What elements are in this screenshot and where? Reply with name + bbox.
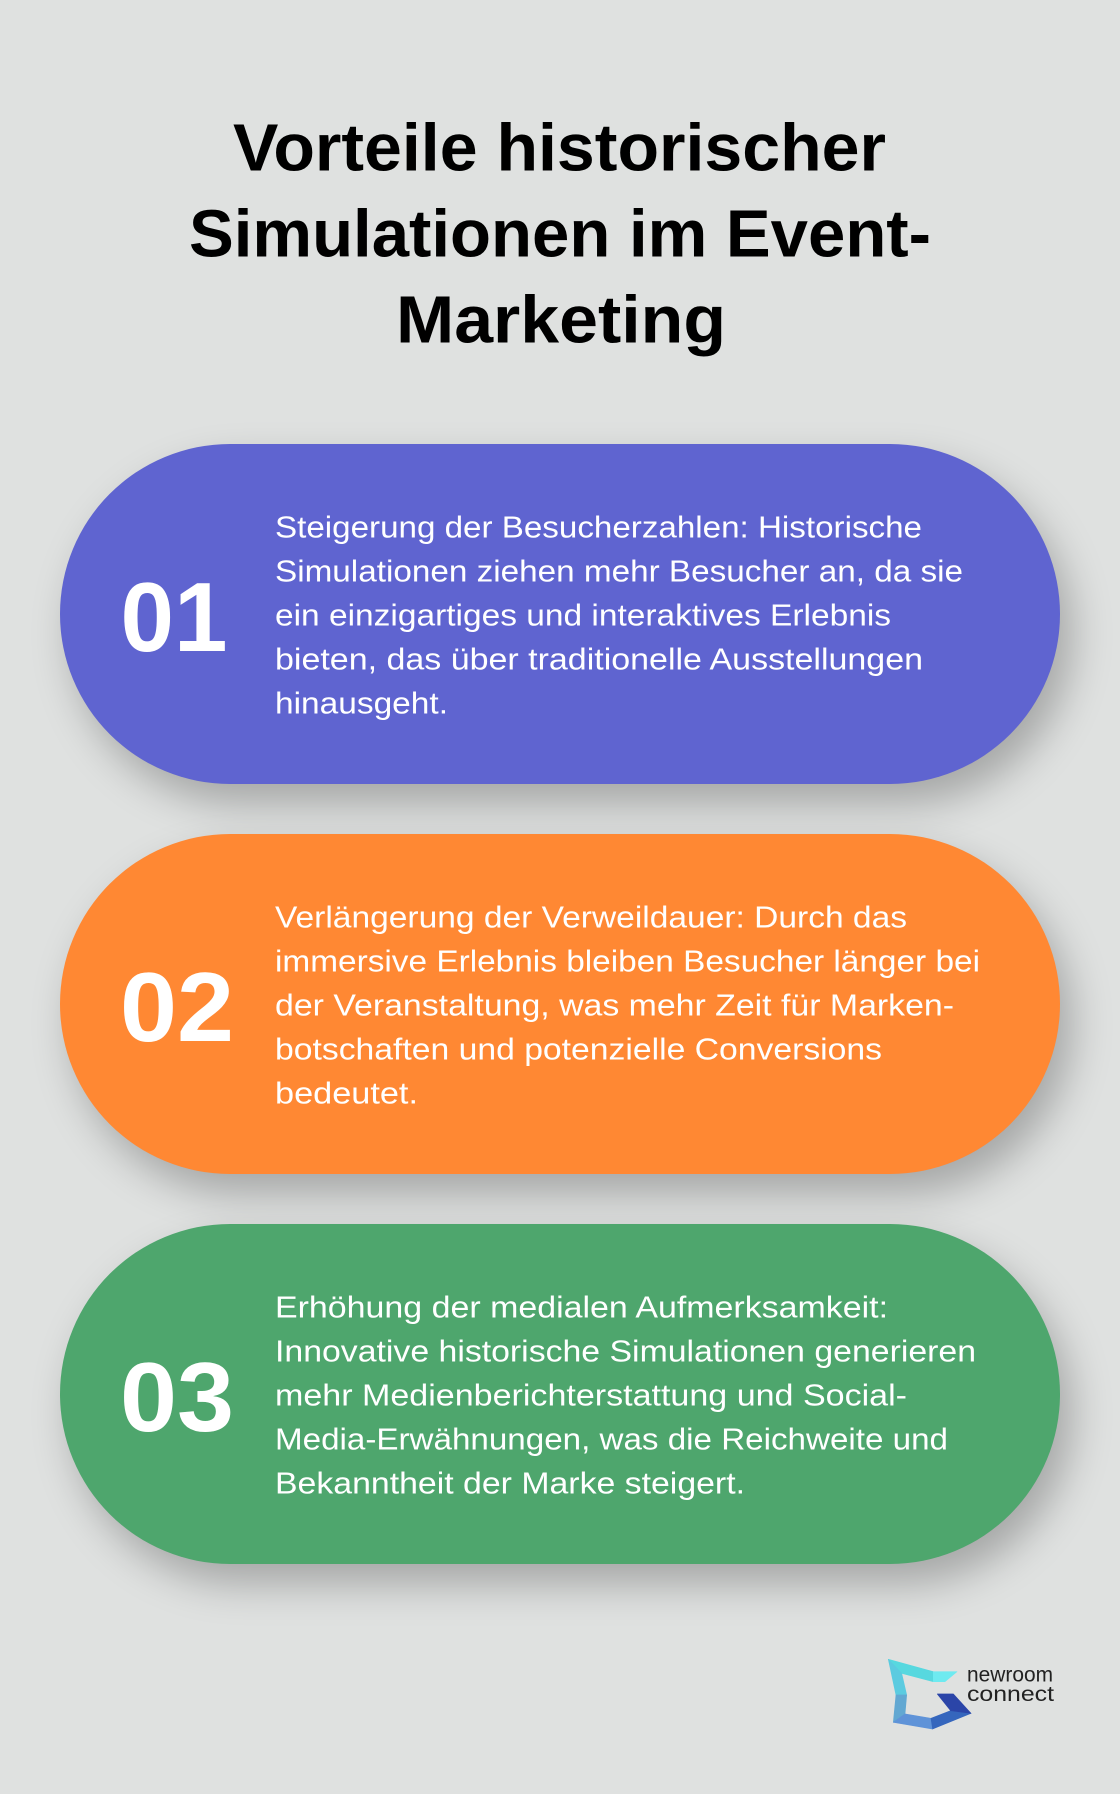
text block: Besucherzahlen: ein einzigartiges und interaktives Erlebnis bbox=[275, 598, 891, 632]
text block: Aufmerksamkeit: Media-Erwähnungen, was die Reichweite und bbox=[275, 1422, 948, 1456]
panel: Verlängerung der Verweildauer bbox=[60, 834, 1060, 1174]
title: Vorteile historischer bbox=[233, 110, 886, 186]
panel: Steigerung der Besucherzahlen bbox=[60, 444, 1060, 784]
text block: Aufmerksamkeit: Erhöhung der medialen Aufmerksamkeit: bbox=[275, 1290, 888, 1324]
logo wordmark: connect bbox=[967, 1683, 1054, 1706]
text block: Verweildauer: immersive Erlebnis bleiben Besucher länger bei bbox=[275, 944, 980, 978]
text block: Aufmerksamkeit bbox=[275, 1290, 976, 1500]
icon: logo mark bbox=[888, 1659, 971, 1729]
number 02: 02 bbox=[120, 952, 234, 1062]
number 01: 01 bbox=[120, 562, 228, 672]
text block: Verweildauer: der Veranstaltung, was mehr Zeit für Marken- bbox=[275, 988, 954, 1022]
title bbox=[189, 110, 931, 358]
text block: Verweildauer bbox=[275, 900, 980, 1110]
text block: Besucherzahlen: bieten, das über traditionelle Ausstellungen bbox=[275, 642, 923, 676]
title: Marketing bbox=[396, 282, 726, 358]
logo wordmark: newroom bbox=[967, 1664, 1053, 1686]
text block: Aufmerksamkeit: Bekanntheit der Marke steigert. bbox=[275, 1466, 745, 1500]
text block: Besucherzahlen: hinausgeht. bbox=[275, 686, 448, 720]
logo: newroom connect bbox=[888, 1659, 1054, 1730]
panel: Erhöhung der medialen Aufmerksamkeit bbox=[60, 1224, 1060, 1564]
text block: Verweildauer: bedeutet. bbox=[275, 1076, 418, 1110]
title: Simulationen im Event- bbox=[189, 196, 931, 272]
text block: Verweildauer: botschaften und potenzielle Conversions bbox=[275, 1032, 882, 1066]
logo wordmark bbox=[967, 1664, 1054, 1706]
number 03: 03 bbox=[120, 1342, 234, 1452]
text block: Aufmerksamkeit: mehr Medienberichterstattung und Social- bbox=[275, 1378, 907, 1412]
text block: Besucherzahlen: Simulationen ziehen mehr Besucher an, da sie bbox=[275, 554, 963, 588]
text block: Aufmerksamkeit: Innovative historische Simulationen generieren bbox=[275, 1334, 976, 1368]
text block: Besucherzahlen: Steigerung der Besucherzahlen: Historische bbox=[275, 510, 922, 544]
text block: Verweildauer: Verlängerung der Verweildauer: Durch das bbox=[275, 900, 907, 934]
text block: Besucherzahlen bbox=[275, 510, 963, 720]
